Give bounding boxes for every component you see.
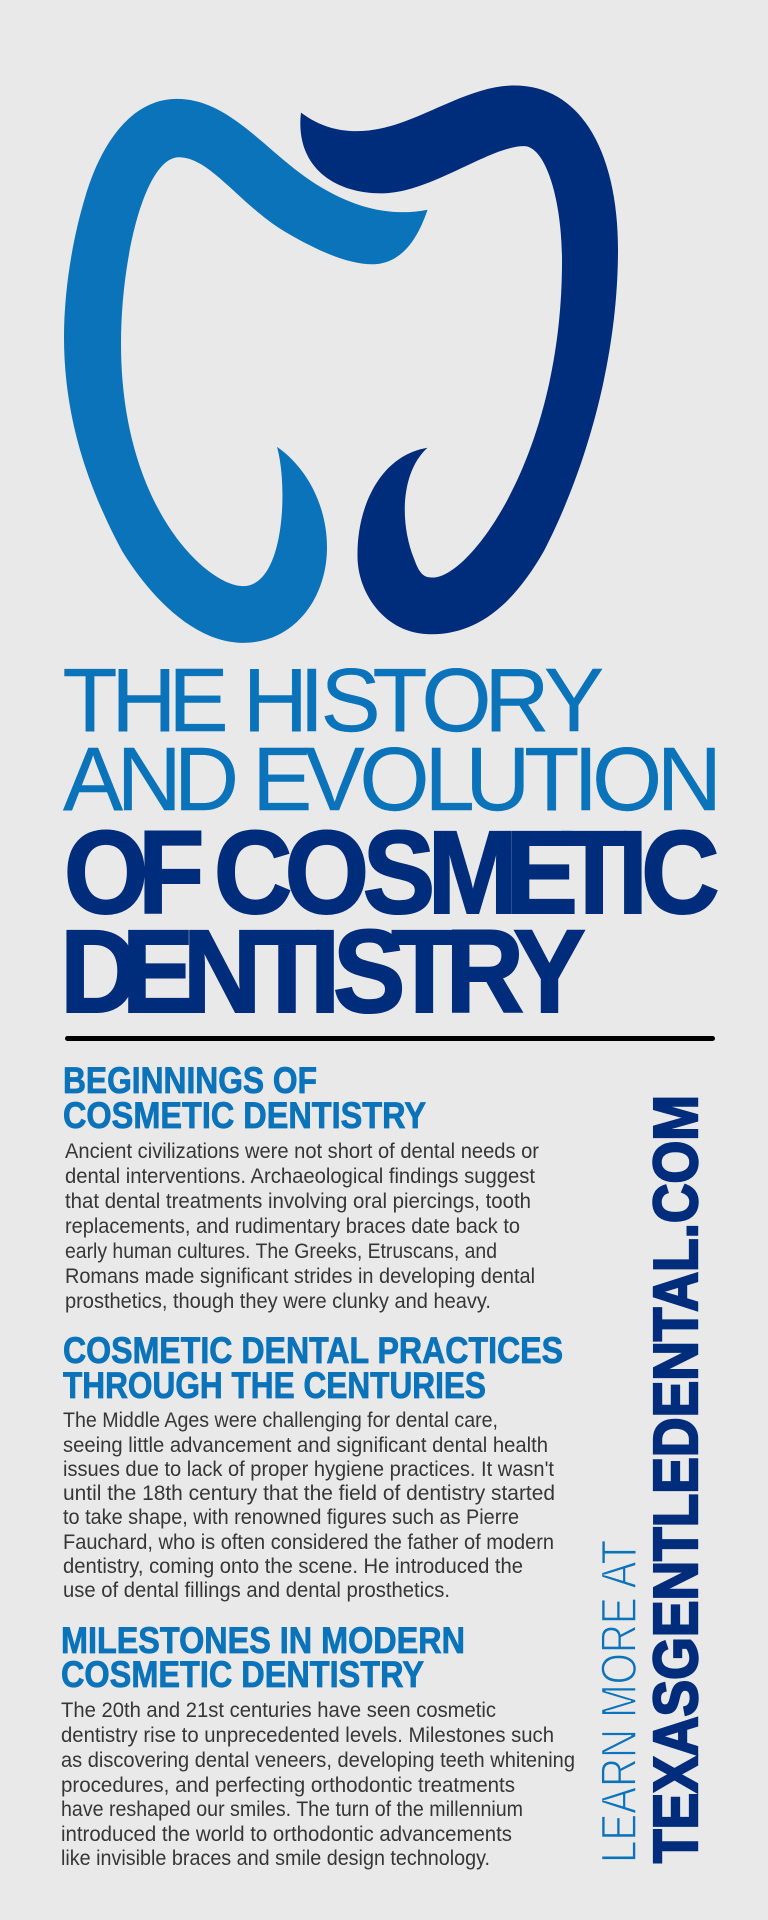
title line 2: N — [657, 730, 722, 830]
heading — [61, 1620, 465, 1695]
body text — [65, 1139, 539, 1313]
title line 3: S — [363, 807, 435, 939]
vertical call to action — [591, 1095, 711, 1863]
body text: The 20th and 21st centuries have seen cosmetic — [61, 1698, 496, 1722]
body text: Ancient civilizations were not short of dental needs or — [65, 1139, 539, 1163]
title line 4: E — [122, 906, 194, 1038]
tooth right half, dark blue — [300, 86, 618, 634]
body text — [63, 1408, 555, 1602]
title line 1: T — [62, 651, 117, 751]
heading: BEGINNINGS OF — [63, 1060, 317, 1101]
title line 4: S — [333, 906, 405, 1038]
body text: Romans made significant strides in developing dental — [65, 1264, 535, 1288]
body text: early human cultures. The Greeks, Etruscans, and — [65, 1239, 497, 1263]
title line 4: T — [254, 906, 320, 1038]
body text: replacements, and rudimentary braces date back to — [65, 1214, 520, 1238]
body text: seeing little advancement and significant dental health — [63, 1433, 548, 1457]
title line 3: F — [138, 807, 204, 939]
title line 4: Y — [513, 906, 586, 1038]
title line 2: D — [174, 730, 239, 830]
title line 2: L — [425, 730, 475, 830]
title line 3: E — [506, 807, 578, 939]
panel: beginnings of cosmetic dentistry — [63, 1060, 539, 1313]
title line 4: R — [446, 906, 524, 1038]
body text: have reshaped our smiles. The turn of the millennium — [61, 1797, 523, 1821]
body text: as discovering dental veneers, developing teeth whitening — [61, 1748, 575, 1772]
title line 1: Y — [544, 651, 604, 751]
title line 2: O — [360, 730, 430, 830]
title line 2: I — [573, 730, 598, 830]
title line 1: H — [243, 651, 308, 751]
title line 2: U — [465, 730, 530, 830]
heading: COSMETIC DENTISTRY — [63, 1095, 426, 1136]
title line 1: R — [484, 651, 550, 751]
body text: introduced the world to orthodontic advancements — [61, 1822, 512, 1846]
panel: milestones in modern cosmetic dentistry — [61, 1620, 575, 1870]
heading: COSMETIC DENTAL PRACTICES — [63, 1330, 563, 1371]
title line 3: C — [214, 807, 292, 939]
heading — [63, 1060, 426, 1136]
title line 2: N — [117, 730, 182, 830]
title line 3: O — [64, 807, 148, 939]
title line 2: A — [63, 730, 123, 830]
body text: dentistry rise to unprecedented levels. Milestones such — [61, 1723, 554, 1747]
body text: issues due to lack of proper hygiene practices. It wasn't — [63, 1457, 554, 1481]
body text: prosthetics, though they were clunky and heavy. — [65, 1289, 491, 1313]
heading — [63, 1330, 563, 1406]
title line 4: N — [183, 906, 261, 1038]
body text: that dental treatments involving oral piercings, tooth — [65, 1189, 531, 1213]
title line 1: E — [168, 651, 229, 751]
body text: dental interventions. Archaeological findings suggest — [65, 1164, 535, 1188]
learn more at: LEARN MORE AT — [591, 1540, 647, 1863]
title line 1: O — [422, 651, 492, 751]
title line 4: D — [60, 906, 139, 1038]
heading: COSMETIC DENTISTRY — [61, 1654, 424, 1695]
body text: procedures, and perfecting orthodontic treatments — [61, 1773, 515, 1797]
body text: use of dental fillings and dental prosthetics. — [63, 1578, 450, 1602]
title line 4: T — [391, 906, 458, 1038]
title line 4: I — [310, 906, 340, 1038]
title line 2: T — [524, 730, 579, 830]
heading: MILESTONES IN MODERN — [61, 1620, 465, 1661]
body text: Fauchard, who is often considered the father of modern — [63, 1530, 554, 1554]
body text: to take shape, with renowned figures such as Pierre — [63, 1505, 519, 1529]
title line 3: T — [561, 807, 628, 939]
title line 1: I — [299, 651, 324, 751]
title line 3: C — [641, 807, 720, 939]
title line 1: T — [372, 651, 427, 751]
icon: tooth logo — [64, 86, 618, 643]
title line 1: S — [321, 651, 381, 751]
body text: dentistry, coming onto the scene. He introduced the — [63, 1554, 523, 1578]
title line 3: I — [618, 807, 648, 939]
website url: TEXASGENTLEDENTAL.COM — [642, 1095, 711, 1863]
panel: cosmetic dental practices through the centuries — [63, 1330, 563, 1602]
title line 2: E — [252, 730, 312, 830]
title line 1: H — [111, 651, 176, 751]
title line 2: V — [305, 730, 365, 830]
body text: like invisible braces and smile design technology. — [61, 1846, 490, 1870]
title line 3: O — [285, 807, 369, 939]
title line 2: O — [592, 730, 662, 830]
tooth left half, light blue — [64, 99, 428, 643]
body text: until the 18th century that the field of dentistry started — [63, 1481, 555, 1505]
body text: The Middle Ages were challenging for dental care, — [63, 1408, 498, 1432]
heading: THROUGH THE CENTURIES — [63, 1365, 486, 1406]
body text — [61, 1698, 575, 1870]
title — [60, 651, 722, 1038]
title line 3: M — [428, 807, 518, 939]
